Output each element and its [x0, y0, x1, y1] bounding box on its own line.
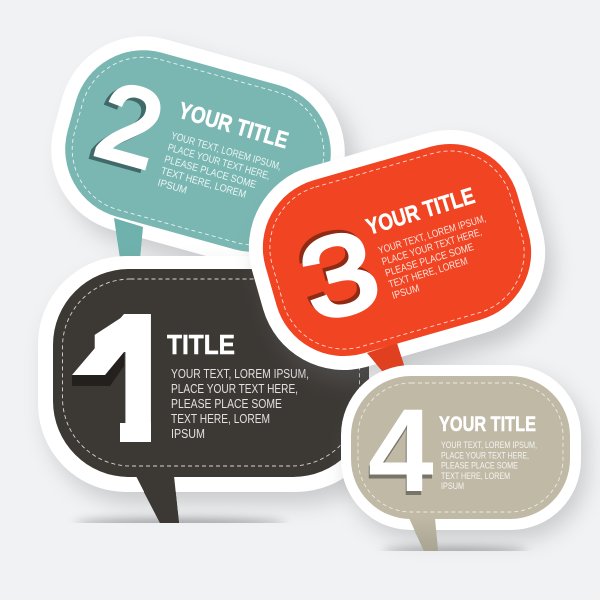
text: step 2: PLEASE PLACE SOME: [163, 154, 257, 191]
number 3: 3: [284, 202, 388, 342]
number 3: 3: [288, 205, 391, 345]
tail: step 2: [114, 218, 143, 258]
text: step 3: TEXT HERE, LOREM: [388, 256, 469, 291]
panel: step 3: [229, 110, 573, 404]
panel: step 2: [32, 17, 376, 299]
text: step 2: IPSUM: [156, 178, 188, 197]
number 4: 4: [368, 385, 434, 517]
text: step 4: PLEASE PLACE SOME: [441, 461, 518, 471]
text: step 3: [377, 214, 501, 302]
tail: step 3: [367, 343, 408, 378]
number 2: 2: [85, 59, 175, 191]
text: step 1: TEXT HERE, LOREM: [171, 412, 270, 426]
text: step 1: IPSUM: [171, 427, 205, 441]
number 2: 2: [80, 61, 170, 194]
text: step 4: PLACE YOUR TEXT HERE,: [441, 450, 529, 460]
text: step 1: [171, 367, 309, 441]
text: step 2: YOUR TEXT, LOREM IPSUM,: [170, 131, 282, 173]
text: step 3: PLEASE PLACE SOME: [384, 242, 475, 279]
text: step 2: PLACE YOUR TEXT HERE,: [166, 143, 271, 182]
text: step 4: IPSUM: [441, 481, 464, 491]
text: step 3: PLACE YOUR TEXT HERE,: [381, 227, 483, 268]
text: step 2: TEXT HERE, LOREM: [160, 166, 247, 201]
text: step 1: YOUR TEXT, LOREM IPSUM,: [171, 367, 309, 381]
text: step 3: YOUR TEXT, LOREM IPSUM,: [377, 214, 487, 257]
number 1: 1: [82, 275, 185, 482]
text: step 1: PLEASE PLACE SOME: [171, 397, 282, 411]
heading: step 4: YOUR TITLE: [439, 413, 536, 436]
text: step 4: YOUR TEXT, LOREM IPSUM,: [441, 440, 537, 450]
heading: step 2: YOUR TITLE: [176, 97, 291, 153]
ground shadow: bubble 4: [383, 548, 527, 556]
text: step 4: [441, 440, 537, 491]
text: step 3: IPSUM: [391, 283, 421, 302]
heading: step 3: YOUR TITLE: [363, 182, 478, 240]
panel: step 1: [38, 256, 392, 523]
panel: step 4: [341, 365, 587, 551]
text: step 4: TEXT HERE, LOREM: [441, 471, 510, 481]
heading: step 1: TITLE: [167, 329, 235, 360]
ground shadow: bubble 1: [75, 519, 285, 529]
number 1: [72, 314, 151, 442]
text: step 1: PLACE YOUR TEXT HERE,: [171, 382, 298, 396]
number 4: 4: [367, 389, 433, 521]
tail: step 4: [409, 519, 438, 551]
text: step 2: [156, 131, 282, 220]
tail: step 1: [136, 477, 179, 523]
